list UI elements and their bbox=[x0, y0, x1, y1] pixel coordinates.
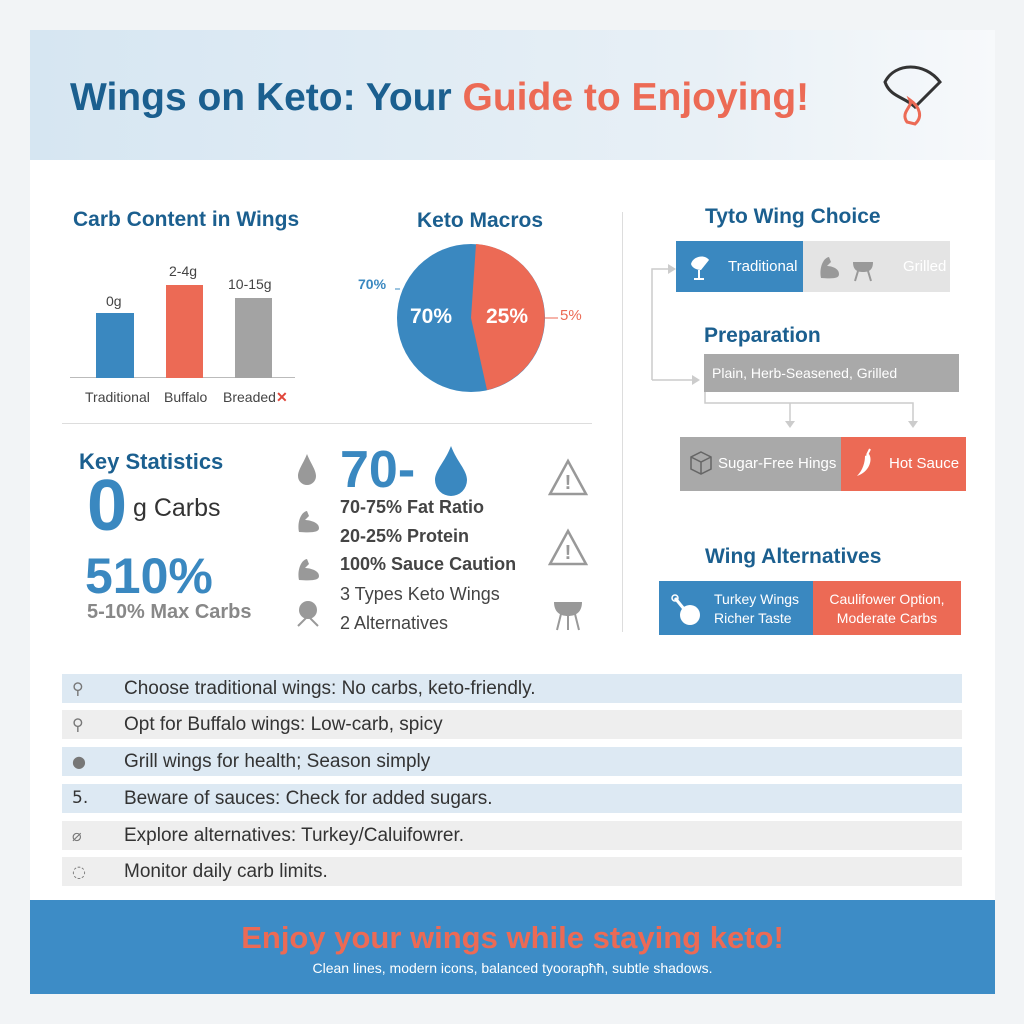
text: 3 Types Keto Wings bbox=[340, 584, 500, 604]
chart: carb content bbox=[70, 208, 299, 405]
tips list: Grill wings for health; Season simply bbox=[124, 751, 430, 772]
tips list: ◌ bbox=[72, 862, 86, 881]
title: Wings on Keto: Your Guide to Enjoying! bbox=[70, 76, 809, 119]
flow: wing choice: Plain, Herb-Seasened, Grilled bbox=[712, 365, 897, 381]
flow: wing choice: Hot Sauce bbox=[889, 455, 959, 472]
tips list: ⚲ bbox=[72, 679, 84, 698]
key statistics: 510% bbox=[85, 548, 213, 604]
flow: wing choice: Sugar-Free Hings bbox=[718, 455, 836, 472]
key statistics: g Carbs bbox=[133, 494, 221, 522]
chart: carb content: Traditional bbox=[85, 389, 150, 405]
stats list icons: ! bbox=[565, 472, 571, 494]
chart: carb content: Carb Content in Wings bbox=[73, 208, 299, 231]
text: 70-75% Fat Ratio bbox=[340, 497, 484, 517]
tips list: Beware of sauces: Check for added sugars. bbox=[124, 788, 493, 809]
chart: carb content: Buffalo bbox=[164, 389, 207, 405]
wing alternatives: Turkey Wings bbox=[714, 591, 799, 607]
tips list bbox=[62, 674, 962, 886]
footer banner: Clean lines, modern icons, balanced tyoorapħħ, subtle shadows. bbox=[312, 960, 713, 976]
flow: wing choice bbox=[651, 205, 966, 491]
chart: carb content: 10-15g bbox=[228, 276, 272, 292]
flow: wing choice: Preparation bbox=[704, 324, 821, 347]
stats list icons bbox=[297, 441, 588, 630]
key statistics: 0 bbox=[87, 466, 127, 546]
tips list: Opt for Buffalo wings: Low-carb, spicy bbox=[124, 714, 443, 735]
chart: keto macros pie: 25% bbox=[486, 305, 528, 328]
key statistics: 5-10% Max Carbs bbox=[87, 601, 252, 623]
chart: carb content: Breaded✕ bbox=[223, 389, 288, 405]
chart: keto macros pie: Keto Macros bbox=[417, 209, 543, 232]
chart: keto macros pie: 70% bbox=[358, 276, 386, 292]
wing alternatives: Moderate Carbs bbox=[837, 610, 937, 626]
flow: wing choice: Grilled bbox=[903, 258, 946, 275]
tips list: Explore alternatives: Turkey/Caluifowrer. bbox=[124, 825, 464, 846]
tips list: Choose traditional wings: No carbs, keto-friendly. bbox=[124, 678, 536, 699]
chart: carb content: 2-4g bbox=[169, 263, 197, 279]
text: 2 Alternatives bbox=[340, 613, 448, 633]
tips list: 5. bbox=[72, 788, 88, 808]
icon: wing with flame bbox=[883, 66, 942, 126]
tips list: ⚲ bbox=[72, 715, 84, 734]
key statistics: Key Statistics bbox=[79, 449, 223, 474]
footer banner: Enjoy your wings while staying keto! bbox=[241, 920, 784, 955]
tips list: ● bbox=[72, 752, 86, 771]
chart: carb content: 0g bbox=[106, 293, 122, 309]
header band bbox=[30, 30, 995, 160]
text: 100% Sauce Caution bbox=[340, 554, 516, 574]
main panel bbox=[30, 160, 995, 900]
wing alternatives: Wing Alternatives bbox=[705, 545, 881, 568]
footer banner bbox=[30, 900, 995, 994]
stats list icons: ! bbox=[565, 542, 571, 564]
flow: wing choice: Tyto Wing Choice bbox=[705, 205, 881, 228]
chart: keto macros pie: 70% bbox=[410, 305, 452, 328]
flow: wing choice: Traditional bbox=[728, 258, 797, 275]
text: 20-25% Protein bbox=[340, 526, 469, 546]
wing alternatives: Caulifower Option, bbox=[829, 591, 945, 607]
stats list icons: 70- bbox=[340, 441, 415, 499]
tips list: Monitor daily carb limits. bbox=[124, 861, 328, 882]
divider bbox=[62, 423, 592, 424]
chart: keto macros pie bbox=[358, 209, 582, 392]
wing alternatives bbox=[659, 545, 961, 635]
tips list: ⌀ bbox=[72, 826, 82, 845]
chart: keto macros pie: 5% bbox=[560, 307, 582, 324]
wing alternatives: Richer Taste bbox=[714, 610, 792, 626]
key statistics bbox=[79, 449, 252, 623]
